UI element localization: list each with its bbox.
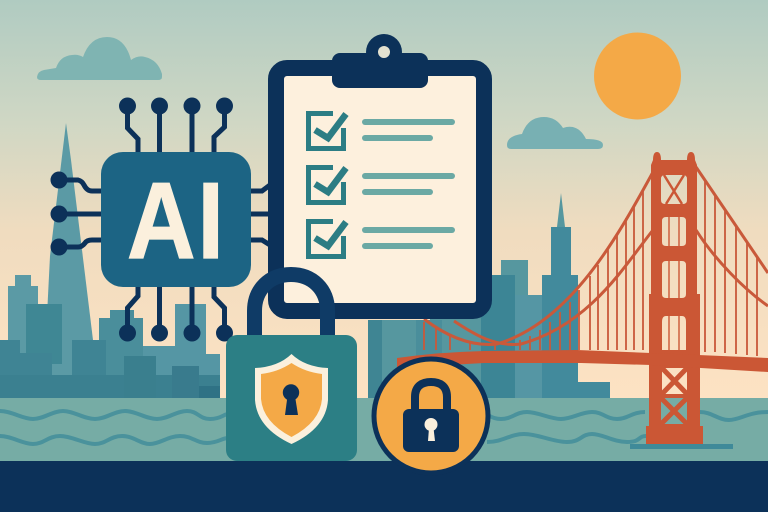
checklist row 3 [308, 222, 455, 256]
chip body [101, 152, 251, 287]
cloud right [507, 117, 603, 149]
clipboard [276, 34, 484, 311]
badge lock body [403, 409, 459, 452]
suspension cables [424, 167, 768, 344]
circuit nodes [50, 98, 233, 342]
cloud left [37, 37, 162, 80]
sun [594, 32, 681, 120]
tower [646, 152, 703, 444]
circuit traces [59, 106, 270, 333]
keyhole [283, 384, 299, 415]
hangers [424, 180, 757, 356]
round lock badge [374, 359, 488, 473]
waves [0, 411, 768, 444]
water [0, 398, 768, 461]
tower footing [630, 444, 733, 449]
shield inner [261, 363, 322, 437]
checklist row 2 [308, 168, 455, 202]
skyline left [0, 123, 220, 398]
AI label: A [127, 160, 195, 281]
tower cross braces [661, 175, 687, 424]
badge shackle [415, 382, 447, 412]
skyline right [368, 193, 610, 398]
roadway deck [397, 350, 768, 372]
badge circle [374, 359, 488, 473]
sky background [0, 0, 768, 400]
padlock with shield [226, 274, 357, 461]
clipboard board [276, 68, 484, 311]
navy ground band [0, 461, 768, 512]
clipboard clip [332, 34, 428, 88]
badge keyhole [424, 418, 438, 441]
shield [255, 354, 328, 444]
padlock shackle [254, 274, 328, 338]
checklist row 1 [308, 114, 455, 148]
AI chip [50, 98, 270, 342]
AI label: I [197, 160, 224, 281]
padlock body [226, 335, 357, 461]
golden gate bridge [397, 152, 768, 449]
